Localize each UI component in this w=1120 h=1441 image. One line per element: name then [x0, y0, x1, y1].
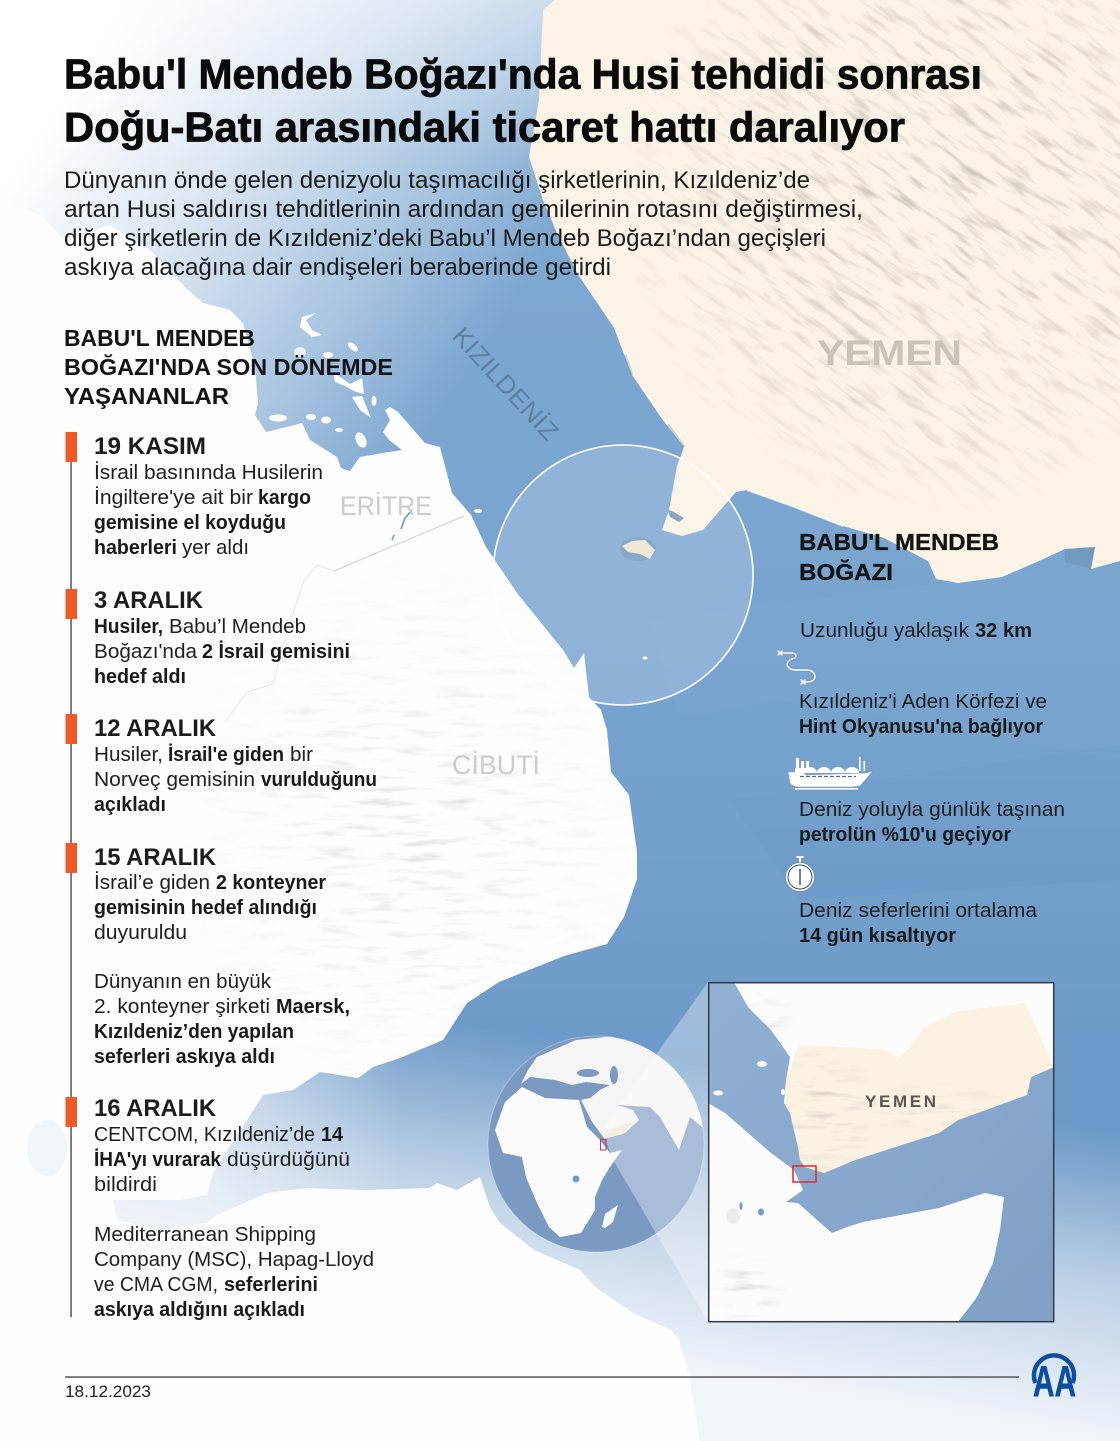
inset: frame	[709, 983, 1054, 1322]
event: 19 Kasım	[94, 433, 323, 559]
icon: stopwatch	[786, 856, 814, 892]
Perim island	[620, 537, 656, 561]
event: 3 Aralık: Husiler,	[94, 615, 163, 638]
event: 3 Aralık: hedef aldı	[94, 665, 186, 688]
intro text: diğer şirketlerin de Kızıldeniz’deki Babu’l Mendeb Boğazı’ndan geçişleri	[64, 225, 826, 252]
inset: Yemen label: YEMEN	[865, 1092, 936, 1111]
zoom wedge from globe to inset	[602, 982, 708, 1322]
fact: time saved: 14 gün kısaltıyor	[799, 924, 956, 947]
event: 16 Aralık: 14	[321, 1123, 344, 1146]
event: 16 Aralık: Company (MSC), Hapag-Lloyd	[94, 1248, 374, 1271]
event: 12 Aralık: 12 ARALIK	[94, 715, 217, 742]
icon: tanker ship	[788, 757, 873, 790]
event: 12 Aralık: Norveç gemisinin	[94, 768, 255, 791]
event: 12 Aralık: açıkladı	[94, 793, 166, 816]
inset: Arabian land	[734, 982, 1054, 1173]
inset: strait marker	[793, 1166, 816, 1182]
label: Cibuti: CİBUTİ	[452, 749, 540, 780]
event: 15 Aralık: İsrail’e giden	[94, 871, 210, 894]
event: 15 Aralık: 15 ARALIK	[94, 844, 217, 871]
logo: Anadolu Agency	[1033, 1355, 1076, 1406]
fact: oil	[799, 798, 1065, 846]
label: Yemen: YEMEN	[817, 334, 962, 373]
title: Doğu-Batı arasındaki ticaret hattı daralıyor	[64, 104, 905, 150]
event: 15 Aralık: 2 konteyner	[216, 871, 326, 894]
heading: Babu'l Mendeb Boğazı	[799, 529, 999, 585]
fact: length: 32 km	[975, 619, 1032, 642]
event: 15 Aralık: gemisinin hedef alındığı	[94, 896, 317, 919]
fact: connection: Kızıldeniz'i Aden Körfezi ve	[799, 690, 1047, 713]
event: 16 Aralık: Mediterranean Shipping	[94, 1223, 316, 1246]
event: 19 Kasım: İsrail basınında Husilerin	[94, 461, 323, 484]
map: Somaliland land, lower coast	[0, 1177, 700, 1441]
map: Yemen land	[529, 0, 1120, 583]
event: 19 Kasım: yer aldı	[182, 536, 249, 559]
fact: connection	[799, 690, 1047, 738]
event: 3 Aralık: 2 İsrail gemisini	[202, 640, 350, 663]
event: 12 Aralık: Husiler,	[94, 743, 163, 766]
event: 19 Kasım: kargo	[258, 486, 311, 509]
event: 3 Aralık: 3 ARALIK	[94, 587, 204, 614]
event: 16 Aralık	[94, 1095, 374, 1321]
red marker on globe	[600, 1140, 606, 1150]
locator globe	[488, 1030, 710, 1252]
inset map	[708, 982, 1054, 1326]
label: Eritre: ERİTRE	[340, 490, 432, 521]
event: 19 Kasım: İngiltere'ye ait bir	[94, 486, 253, 509]
fact: connection: Hint Okyanusu'na bağlıyor	[799, 715, 1043, 738]
event: 3 Aralık	[94, 587, 350, 688]
heading: timeline: YAŞANANLAR	[64, 383, 229, 409]
event: 16 Aralık: ve CMA CGM,	[94, 1273, 218, 1296]
intro text: artan Husi saldırısı tehditlerinin ardından gemilerinin rotasını değiştirmesi,	[64, 196, 863, 223]
intro text: askıya alacağına dair endişeleri beraberinde getirdi	[64, 254, 611, 281]
logo: Anadolu Agency: AA	[1033, 1357, 1076, 1406]
intro text: Dünyanın önde gelen denizyolu taşımacılığı şirketlerinin, Kızıldeniz’de	[64, 167, 810, 194]
timeline spine and markers	[66, 432, 77, 1317]
event: 15 Aralık: Dünyanın en büyük	[94, 970, 272, 993]
fact: oil: Deniz yoluyla günlük taşınan	[799, 798, 1065, 821]
event: 12 Aralık: İsrail'e giden	[168, 743, 284, 766]
event: 12 Aralık: vurulduğunu	[261, 768, 377, 791]
label: Kızıldeniz: KIZILDENİZ	[447, 321, 565, 446]
globe: Eurasia	[521, 1030, 710, 1150]
event: 19 Kasım: haberleri	[94, 536, 177, 559]
fact: oil: petrolün %10'u geçiyor	[799, 823, 1011, 846]
event: 3 Aralık: Babu’l Mendeb	[169, 615, 306, 638]
event: 12 Aralık	[94, 715, 377, 816]
event: 15 Aralık: Maersk,	[276, 995, 350, 1018]
heading: timeline: BABU'L MENDEB	[64, 325, 255, 351]
heading: timeline	[64, 325, 393, 409]
globe: Madagascar	[602, 1205, 618, 1228]
intro text	[64, 167, 863, 281]
event: 16 Aralık: 16 ARALIK	[94, 1095, 217, 1122]
inset: African land	[708, 1103, 1004, 1322]
heading: Babu'l Mendeb Boğazı: BABU'L MENDEB	[799, 529, 999, 555]
heading: timeline: BOĞAZI'NDA SON DÖNEMDE	[64, 353, 393, 380]
event: 16 Aralık: bildirdi	[94, 1173, 157, 1196]
footer rule	[65, 1376, 1019, 1378]
inset: Yemen	[784, 1003, 1054, 1173]
globe: inland seas	[577, 1069, 599, 1077]
event: 16 Aralık: CENTCOM, Kızıldeniz’de	[94, 1123, 315, 1146]
event: 16 Aralık: düşürdüğünü	[227, 1148, 350, 1171]
Babu'l Mendeb highlight circle	[493, 445, 753, 705]
event: 19 Kasım: gemisine el koyduğu	[94, 511, 286, 534]
event: 15 Aralık: Kızıldeniz’den yapılan	[94, 1020, 294, 1043]
event: 15 Aralık	[94, 844, 350, 1068]
map: African land, Eritrea and Djibouti	[0, 200, 640, 1200]
title: Babu'l Mendeb Boğazı'nda Husi tehdidi sonrası	[64, 50, 982, 98]
date: 18.12.2023	[65, 1383, 151, 1401]
event: 16 Aralık: seferlerini	[224, 1273, 318, 1296]
globe: Yemen tint	[604, 1121, 637, 1139]
map: Dahlak islands	[269, 313, 648, 660]
event: 16 Aralık: İHA'yı vurarak	[94, 1148, 222, 1171]
icon: route	[778, 651, 815, 684]
event: 19 Kasım: 19 KASIM	[94, 433, 206, 460]
fact: time saved: Deniz seferlerini ortalama	[799, 899, 1038, 922]
event: 15 Aralık: duyuruldu	[94, 921, 187, 944]
event: 3 Aralık: Boğazı'nda	[94, 640, 198, 663]
fact: length: Uzunluğu yaklaşık	[800, 619, 970, 642]
event: 15 Aralık: seferleri askıya aldı	[94, 1045, 275, 1068]
globe: Africa	[495, 1087, 622, 1237]
event: 12 Aralık: bir	[290, 743, 313, 766]
title	[64, 50, 982, 150]
event: 15 Aralık: 2. konteyner şirketi	[94, 995, 270, 1018]
heading: Babu'l Mendeb Boğazı: BOĞAZI	[799, 558, 893, 585]
event: 16 Aralık: askıya aldığını açıkladı	[94, 1298, 305, 1321]
globe: lakes	[572, 1176, 580, 1182]
fact: time saved	[799, 899, 1038, 947]
